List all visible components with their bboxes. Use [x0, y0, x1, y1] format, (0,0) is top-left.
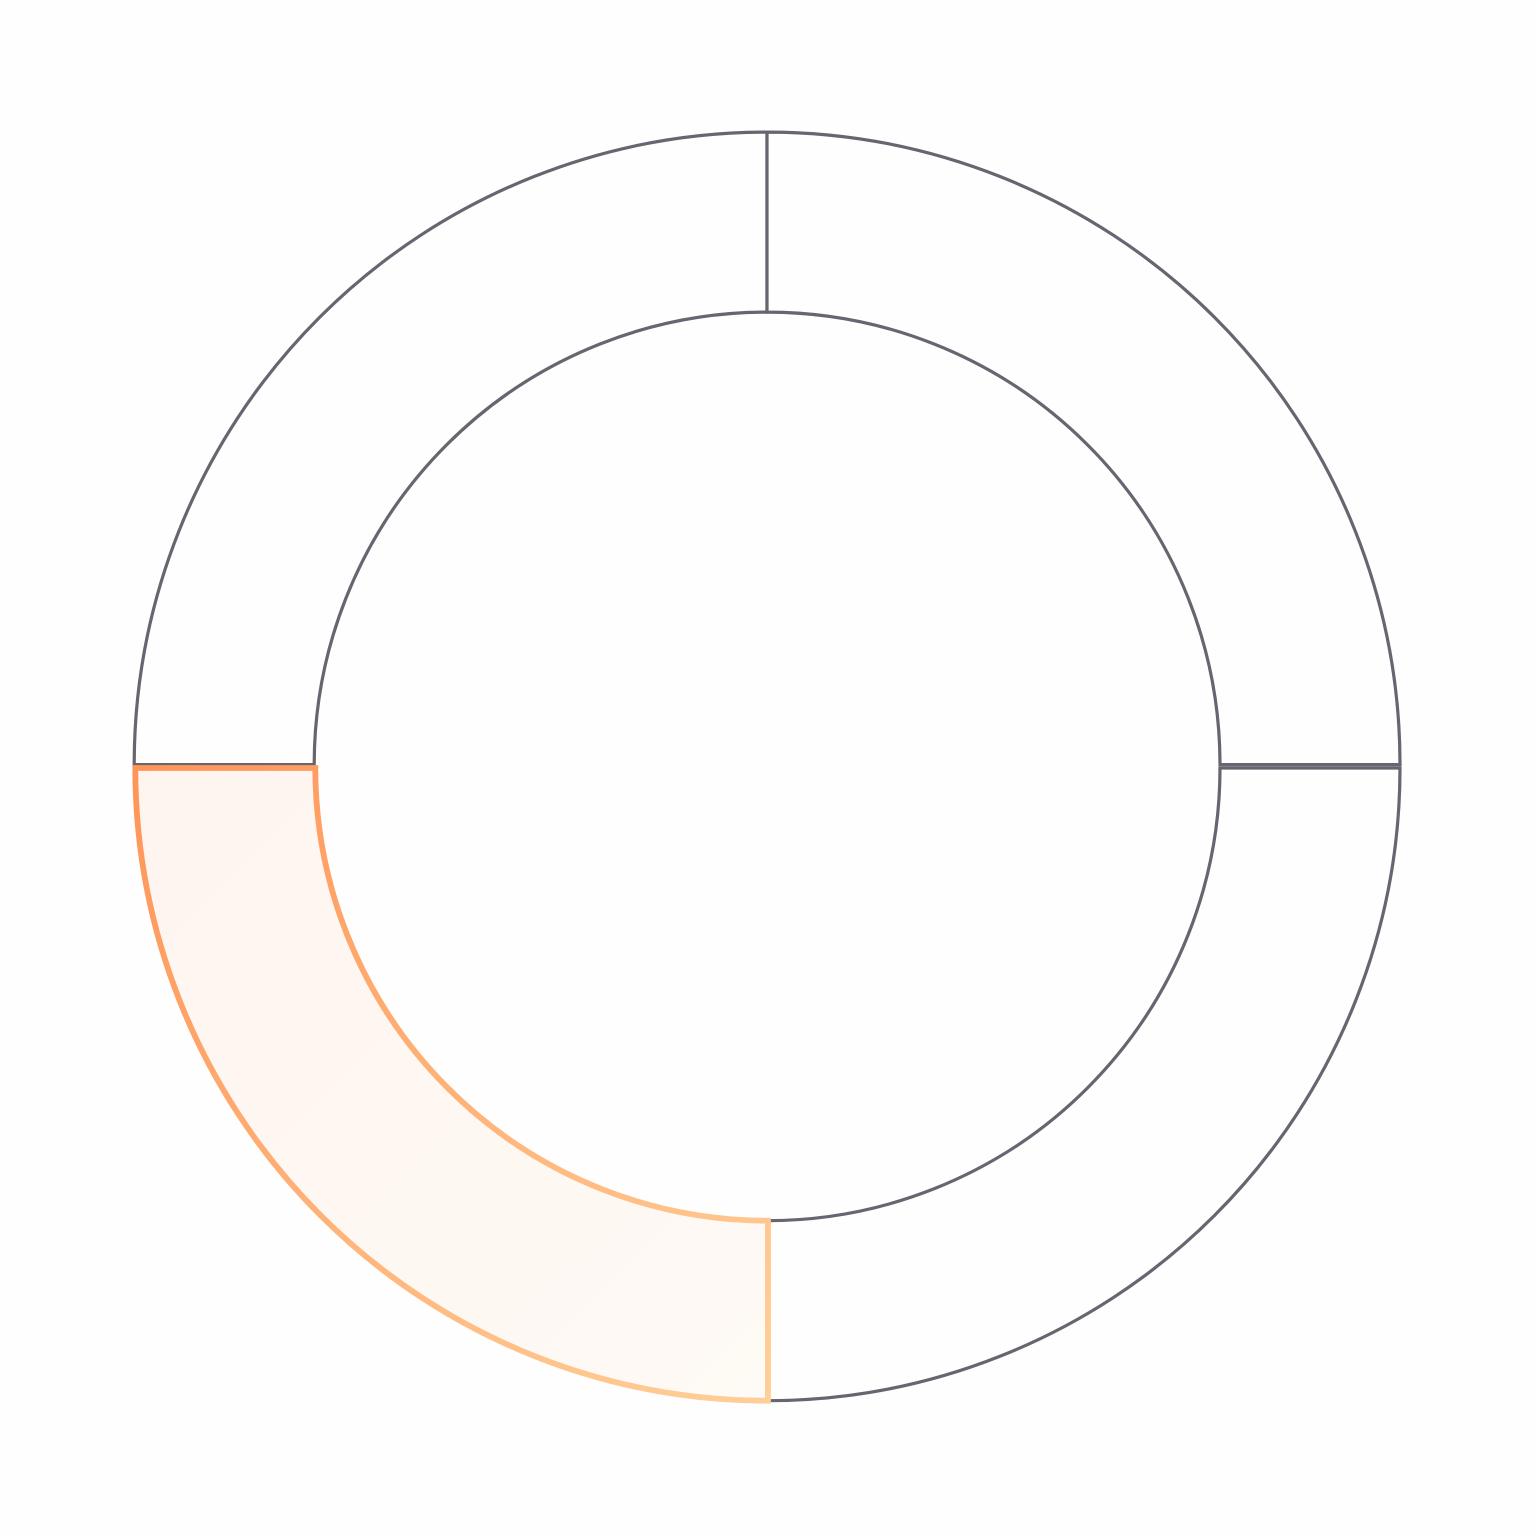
- segment: bottom-left highlighted orange: [135, 768, 768, 1401]
- segment: top-left outline: [134, 132, 767, 765]
- segment: top-right outline: [767, 132, 1400, 765]
- segment: bottom-right outline: [767, 768, 1400, 1401]
